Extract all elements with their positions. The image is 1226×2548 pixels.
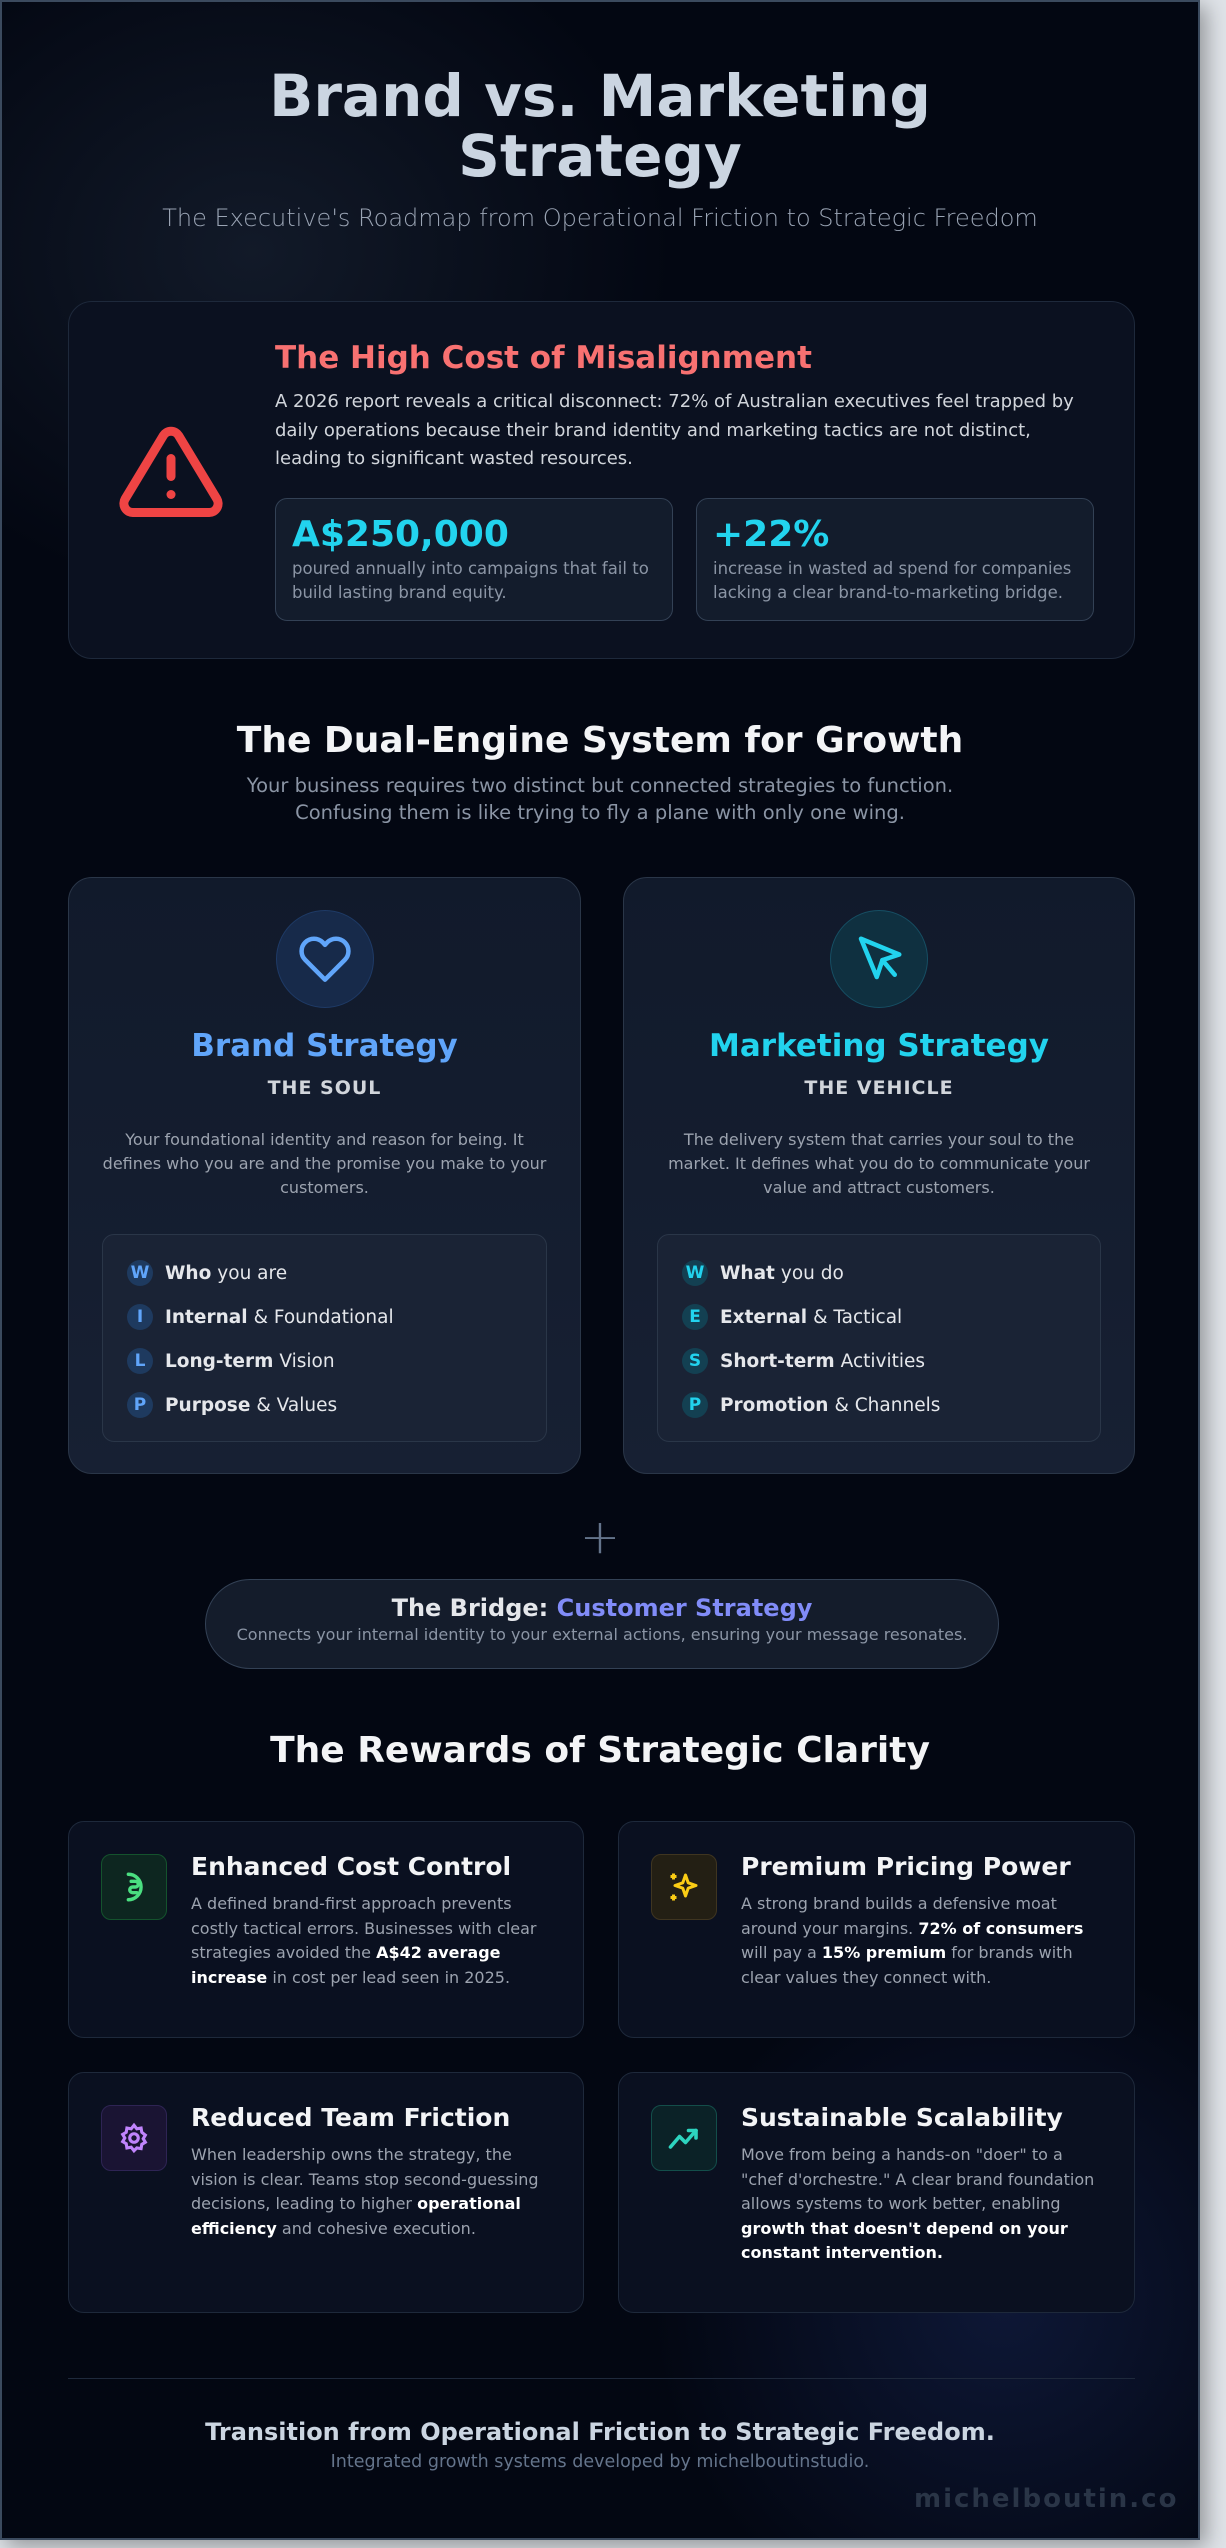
icon: heart [276,910,374,1008]
list: marketing: Activities [841,1350,925,1372]
reward: scalability: Move from being a hands-on "doer" to a "chef d'orchestre." A clear brand foundation allows systems to work better, enabling growth that doesn't depend on your constant intervention. [741,2145,1094,2262]
card: marketing: The delivery system that carries your soul to the market. It defines what you do to communicate your value and attract customers. [668,1130,1090,1197]
list: brand: Internal [165,1306,248,1328]
paragraph: A 2026 report reveals a critical disconnect: 72% of Australian executives feel trapped by daily operations because their brand identity and marketing tactics are not distinct, leading to significant wasted resources. [275,391,1074,469]
card: marketing: THE VEHICLE [804,1077,954,1099]
reward: cost control: Enhanced Cost Control [191,1852,511,1881]
section subtitle [246,774,953,824]
section heading: The Dual-Engine System for Growth [237,720,963,761]
card: brand: Your foundational identity and reason for being. It defines who you are and the promise you make to your customers. [103,1130,546,1197]
title: Strategy [458,122,742,190]
stat 2: +22% [713,514,829,555]
list: marketing: & Tactical [813,1306,902,1328]
card: brand [68,877,581,1474]
watermark: michelboutin.co [914,2484,1178,2514]
list: brand: & Foundational [254,1306,394,1328]
stat 2 [696,498,1094,621]
card title: Brand Strategy [191,1028,458,1064]
icon: trend [651,2105,717,2171]
bridge pill: The Bridge: Customer Strategy [392,1594,812,1622]
icon: plus: + [580,1509,620,1565]
stat 1 [275,498,673,621]
icon: gear [101,2105,167,2171]
reward: pricing: A strong brand builds a defensive moat around your margins. 72% of consumers will pay a 15% premium for brands with clear values they connect with. [741,1894,1083,1986]
reward: cost control [68,1821,584,2038]
card: marketing [623,877,1135,1474]
title: Brand vs. Marketing [269,62,931,130]
reward: friction: When leadership owns the strategy, the vision is clear. Teams stop second-guessing decisions, leading to higher operational efficiency and cohesive execution. [191,2145,538,2238]
bridge pill: Connects your internal identity to your external actions, ensuring your message resonates. [237,1625,967,1644]
stat 1: A$250,000 [292,514,509,555]
title [269,62,931,190]
footer: Transition from Operational Friction to Strategic Freedom. [205,2418,995,2446]
footer credit: Integrated growth systems developed by michelboutinstudio. [331,2452,869,2472]
reward: cost control: A defined brand-first approach prevents costly tactical errors. Businesses with clear strategies avoided the A$42 average increase in cost per lead seen in 2025. [191,1894,536,1986]
list: brand: & Values [256,1394,337,1416]
icon: cursor [830,910,928,1008]
rewards heading: The Rewards of Strategic Clarity [270,1730,930,1771]
list: brand: Purpose [165,1394,250,1416]
heading: The High Cost of Misalignment [275,340,812,376]
list: marketing: Promotion [720,1394,828,1416]
icon: dollar [101,1854,167,1920]
list: marketing: E [689,1307,701,1327]
reward: friction: Reduced Team Friction [191,2103,510,2132]
stat 2: increase in wasted ad spend for companies lacking a clear brand-to-marketing bridge. [713,559,1071,602]
list: marketing: What [720,1262,775,1284]
list: brand [102,1234,547,1442]
panel: misalignment [68,301,1135,659]
list: brand: L [135,1351,145,1371]
reward: scalability: Sustainable Scalability [741,2103,1063,2132]
icon: warning [119,426,223,517]
list: marketing: Short-term [720,1350,835,1372]
list: marketing: W [686,1263,704,1283]
list: brand: W [131,1263,149,1283]
stat 1: poured annually into campaigns that fail to build lasting brand equity. [292,559,649,602]
bridge pill [205,1579,999,1669]
list: brand: Who [165,1262,211,1284]
subtitle: The Executive's Roadmap from Operational Friction to Strategic Freedom [162,204,1038,232]
section subtitle: Your business requires two distinct but connected strategies to function. [247,774,953,797]
list: marketing: you do [781,1262,844,1284]
card: brand: THE SOUL [268,1077,381,1099]
list: brand: Long-term [165,1350,273,1372]
list: brand: Vision [279,1350,335,1372]
card title: Marketing Strategy [709,1028,1049,1064]
list: brand: P [134,1395,146,1415]
reward: friction [68,2072,584,2313]
icon: sparkles [651,1854,717,1920]
reward: scalability [618,2072,1135,2313]
list: marketing: & Channels [834,1394,940,1416]
list: marketing [657,1234,1101,1442]
section subtitle: Confusing them is like trying to fly a plane with only one wing. [295,801,905,824]
list: brand: I [137,1307,143,1327]
reward: pricing [618,1821,1135,2038]
list: marketing: P [689,1395,701,1415]
list: marketing: External [720,1306,807,1328]
list: marketing: S [689,1351,701,1371]
reward: pricing: Premium Pricing Power [741,1852,1071,1881]
list: brand: you are [217,1262,287,1284]
